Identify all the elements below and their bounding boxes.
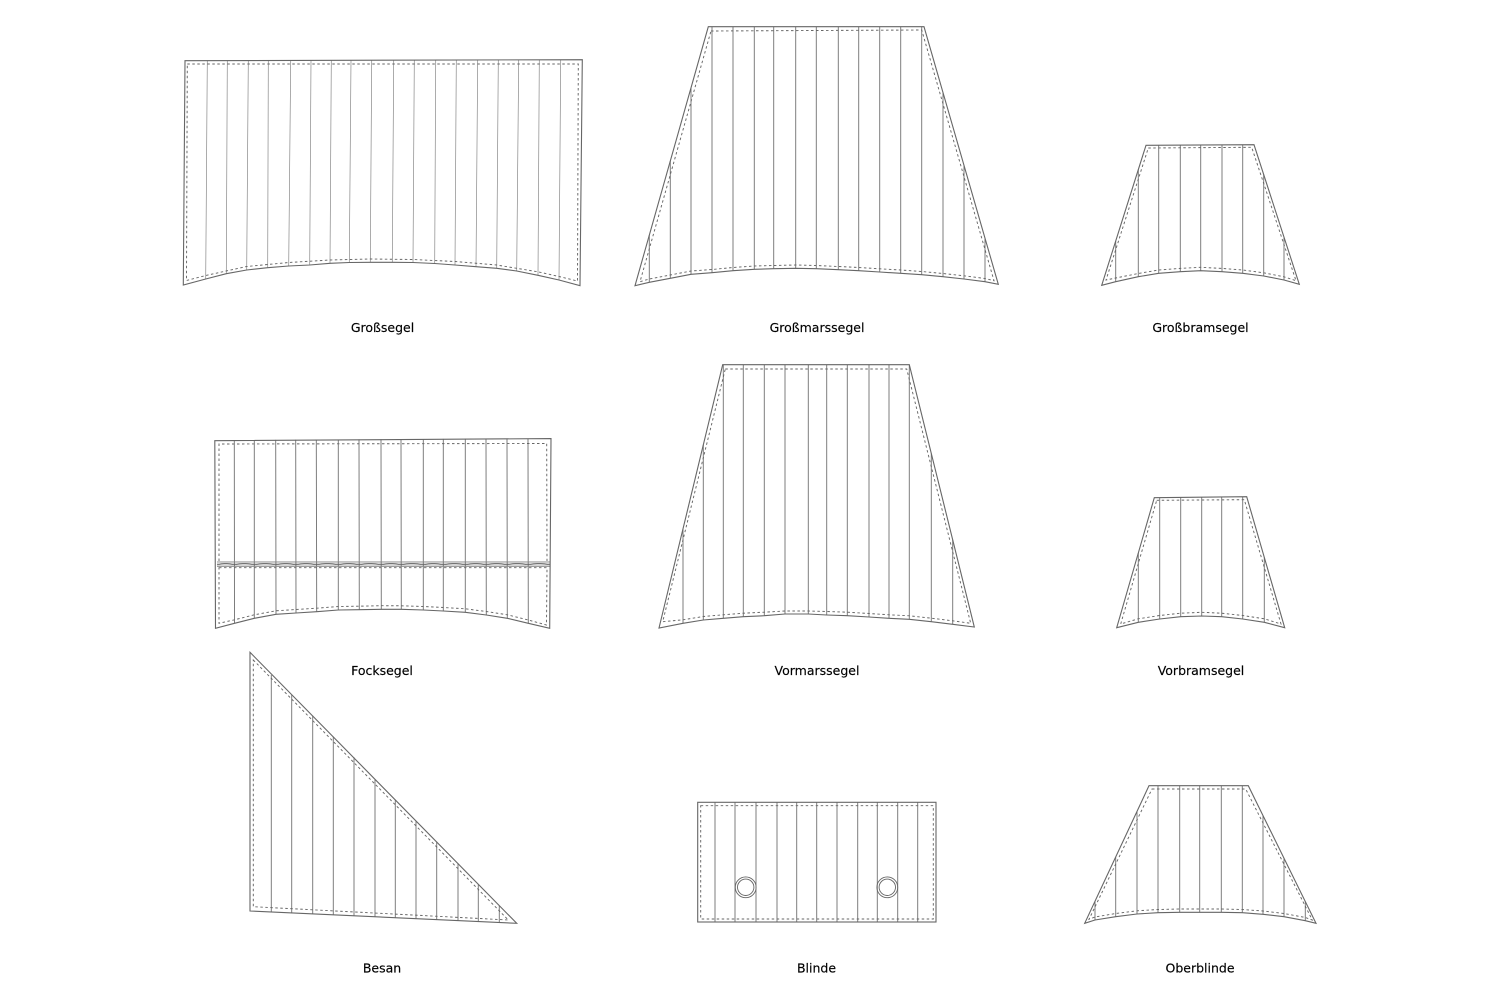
label: Vorbramsegel: Vorbramsegel — [1158, 663, 1244, 678]
reef stitching — [217, 564, 550, 565]
outline — [1102, 145, 1299, 285]
sail: Großmarssegel — [635, 27, 998, 286]
label: Vormarssegel: Vormarssegel — [775, 663, 859, 678]
dashed hem — [253, 660, 508, 920]
reef lines — [217, 562, 550, 567]
label: Oberblinde: Oberblinde — [1165, 960, 1235, 976]
outline — [1117, 497, 1285, 628]
seams — [683, 365, 953, 624]
reef band — [217, 562, 550, 566]
left eyelet — [735, 877, 756, 898]
label: Blinde: Blinde — [797, 960, 836, 976]
outline — [250, 652, 517, 923]
label: Großmarssegel: Großmarssegel — [770, 320, 864, 335]
seams — [1095, 786, 1305, 921]
label: Besan: Besan — [363, 960, 401, 976]
right eyelet — [877, 877, 898, 898]
seams — [1138, 497, 1264, 622]
label: Focksegel: Focksegel — [351, 663, 413, 678]
sail: Blinde — [698, 802, 936, 922]
label: Großbramsegel: Großbramsegel — [1152, 320, 1249, 335]
seams — [234, 438, 528, 623]
dashed hem — [1121, 500, 1281, 624]
dashed hem — [640, 30, 994, 282]
sail: Großbramsegel — [1102, 145, 1299, 285]
sail: Vorbramsegel — [1117, 497, 1285, 628]
sail: Besan — [250, 652, 517, 923]
dashed hem — [219, 444, 547, 625]
seams — [206, 60, 561, 280]
outline — [698, 802, 936, 922]
outline — [635, 27, 998, 286]
label: Großsegel: Großsegel — [351, 320, 414, 335]
outline — [1085, 786, 1316, 923]
sail: Oberblinde — [1085, 786, 1316, 923]
sail: Focksegel — [215, 438, 551, 628]
dashed hem — [1089, 789, 1312, 920]
outline — [215, 439, 551, 628]
seams — [715, 802, 918, 922]
sail: Vormarssegel — [659, 365, 974, 628]
seams — [649, 27, 985, 282]
dashed hem — [1106, 147, 1296, 281]
outline — [659, 365, 974, 628]
seams — [271, 675, 499, 922]
dashed hem — [186, 64, 578, 281]
dashed hem — [663, 369, 971, 623]
dashed hem — [701, 806, 933, 919]
sail: Großsegel — [183, 60, 582, 286]
outline — [183, 60, 582, 286]
seams — [1116, 145, 1284, 282]
